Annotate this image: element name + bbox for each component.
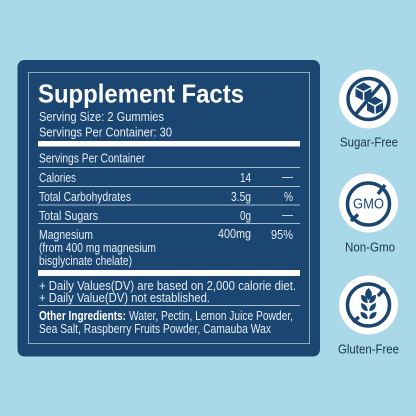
label: sugar-free: Sugar-Free — [340, 134, 398, 150]
panel: supplement facts — [18, 60, 320, 356]
nutrition table: 95% — [271, 227, 293, 242]
other ingredients: Other Ingredients: — [39, 308, 126, 323]
nutrition table: 400mg — [218, 226, 251, 241]
nutrition table: 14 — [240, 170, 251, 185]
icon: gluten-free — [339, 276, 398, 334]
label: gluten-free: Gluten-Free — [338, 342, 399, 356]
nutrition table: % — [284, 189, 293, 204]
nutrition table: bisglycinate chelate) — [39, 253, 132, 268]
nutrition table: Calories — [39, 170, 76, 185]
nutrition table: (from 400 mg magnesium — [39, 240, 156, 255]
serving information: Serving Size: 2 Gummies — [39, 109, 164, 124]
thick divider top — [38, 141, 300, 146]
serving information: Servings Per Container: 30 — [39, 124, 172, 140]
nutrition table — [38, 150, 300, 268]
other ingredients: Water, Pectin, Lemon Juice Powder, — [129, 308, 293, 323]
other ingredients: Sea Salt, Raspberry Fruits Powder, Camauba Wax — [39, 321, 271, 336]
nutrition table: Total Carbohydrates — [39, 189, 131, 204]
other ingredients — [39, 308, 293, 336]
icon: non-gmo — [339, 174, 398, 232]
icon: non-gmo: GMO — [353, 196, 384, 212]
thick divider bottom — [38, 270, 300, 276]
nutrition table: Servings Per Container — [39, 150, 146, 166]
daily value notes — [39, 278, 296, 305]
nutrition table: 3.5g — [231, 189, 251, 204]
label: non-gmo: Non-Gmo — [345, 240, 395, 254]
daily value notes: + Daily Values(DV) are based on 2,000 calorie diet. — [39, 278, 296, 293]
nutrition table: Total Sugars — [39, 208, 98, 223]
title: Supplement Facts — [38, 78, 244, 108]
icon: sugar-free — [339, 70, 398, 128]
serving information — [39, 109, 172, 140]
nutrition table: Magnesium — [39, 227, 93, 242]
nutrition table: 0g — [240, 208, 251, 223]
daily value notes: + Daily Value(DV) not established. — [39, 290, 210, 305]
